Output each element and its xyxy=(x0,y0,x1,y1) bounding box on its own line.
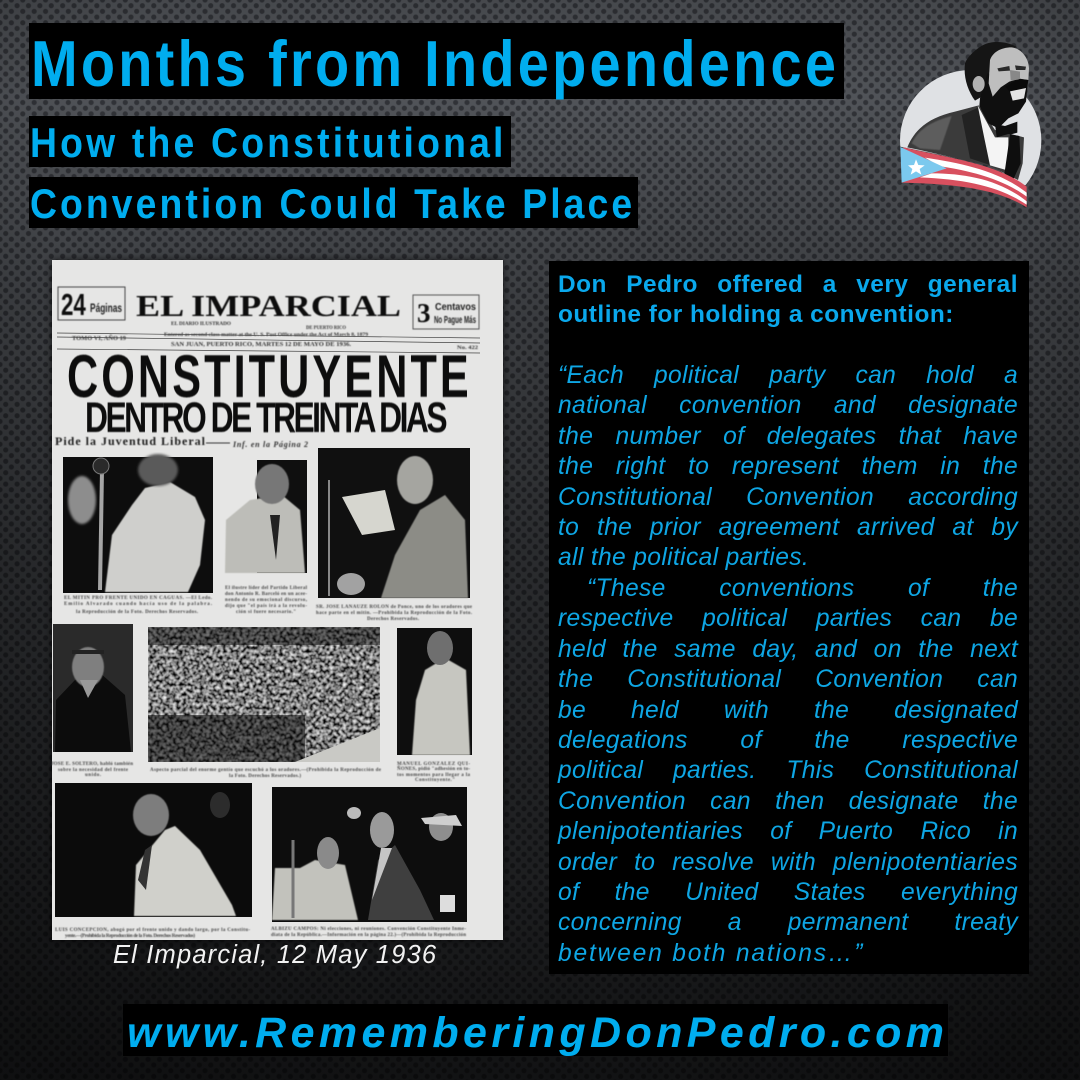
quote paragraph 2: the Constitutional Convention can xyxy=(558,666,1018,693)
quote paragraph 1: all the political parties. xyxy=(558,544,809,571)
quote paragraph 2: order to resolve with plenipotentiaries xyxy=(558,849,1018,876)
captions row 2 xyxy=(51,762,470,783)
nose shadow xyxy=(1010,70,1020,81)
quote paragraph 2: concerning a permanent treaty xyxy=(558,909,1018,936)
intro heading: Don Pedro offered a very general xyxy=(558,271,1018,298)
masthead small print: Entered as second class matter at the U. S. Post Office under the Act of March 8, 1879 xyxy=(164,333,369,338)
hair xyxy=(965,42,1017,101)
captions row 2: ÑONES, pidió "adhesión en to- xyxy=(397,766,470,772)
captions row 1 xyxy=(64,586,473,622)
paper xyxy=(52,260,503,940)
captions row 2: sobre la necesidad del frente xyxy=(58,768,129,773)
subtitle line 1: How the Constitutional xyxy=(30,120,503,166)
masthead: price box: 3 xyxy=(417,298,430,328)
moustache and mouth xyxy=(1005,79,1028,93)
masthead small print: EL DIARIO ILUSTRADO xyxy=(171,321,232,327)
photo 2: Liberal Party leader xyxy=(225,460,307,573)
captions row 1: ción si fuere necesario." xyxy=(236,610,296,615)
captions row 1: hace parte en el mitin. —Prohibida la Reproducción de la Foto. xyxy=(316,611,473,616)
portrait of Don Pedro with flag xyxy=(900,42,1041,211)
quote paragraph 1: “Each political party can hold a xyxy=(558,362,1018,389)
quote paragraph 1: national convention and designate xyxy=(558,392,1018,419)
bow tie and tie xyxy=(995,122,1021,179)
quote paragraph 1: the right to represent them in the xyxy=(558,453,1018,480)
quote paragraph 1 xyxy=(558,362,1019,571)
kicker xyxy=(55,434,308,449)
photo 1: speaker at microphone xyxy=(63,454,213,593)
jacket lit shoulder xyxy=(912,116,952,150)
masthead: price box: No Pague Más xyxy=(434,315,476,326)
masthead: page count box xyxy=(58,287,125,322)
subtitle line 2: Convention Could Take Place xyxy=(30,181,632,227)
shirt xyxy=(978,105,1008,171)
captions row 1: El ilustre líder del Partido Liberal xyxy=(225,586,308,591)
masthead small print: SAN JUAN, PUERTO RICO, MARTES 12 DE MAYO DE 1936. xyxy=(171,341,351,348)
captions row 1: EL MITIN PRO FRENTE UNIDO EN CAGUAS. —El Ledo. xyxy=(64,596,213,601)
quote paragraph 2: delegations of the respective xyxy=(558,727,1018,754)
quote paragraph 2: held the same day, and on the next xyxy=(558,636,1018,663)
captions row 3 xyxy=(55,927,466,939)
jacket lapel xyxy=(962,107,990,165)
flag star xyxy=(908,159,925,175)
photo 4: portrait with glasses xyxy=(53,624,133,752)
kicker: Pide la Juventud Liberal xyxy=(55,434,206,448)
captions row 3: diata de la República.—Información en la página 22.)—(Prohibida la Reproducción xyxy=(271,933,466,938)
sub-headline: DENTRO DE TREINTA DIAS xyxy=(85,394,448,442)
captions row 1: dijo que "el país irá a la revolu- xyxy=(225,604,307,609)
captions row 3: LUIS CONCEPCION, abogó por el frente unido y dando largo, por la Constitu- xyxy=(55,928,250,933)
headline: CONSTITUYENTE xyxy=(67,344,469,411)
photo 7: man in white jacket xyxy=(55,783,252,917)
masthead: price box: Centavos xyxy=(435,302,476,313)
intro heading xyxy=(558,271,1018,328)
newspaper page: El Imparcial xyxy=(51,260,503,940)
quote paragraph 2: between both nations…” xyxy=(558,940,864,967)
captions row 3: ALBIZU CAMPOS: Ni elecciones, ni reuniones. Convención Constituyente Inme- xyxy=(271,927,466,932)
quote paragraph 2: political parties. This Constitutional xyxy=(558,757,1018,784)
captions row 2: JOSE E. SOLTERO, habló también xyxy=(51,762,133,767)
captions row 1: nendo de su emocional discurso, xyxy=(225,598,308,603)
ear xyxy=(973,76,985,92)
eyes xyxy=(997,65,1026,71)
captions row 2: Aspecto parcial del enorme gentío que escuchó a los oradores.—(Prohibida la Reproducción de xyxy=(150,768,382,773)
masthead small print: No. 422 xyxy=(457,345,478,351)
captions row 1: SR. JOSE LANAUZE ROLON de Ponce, uno de los oradores que xyxy=(316,605,473,610)
photo 8: group at microphone xyxy=(272,787,467,922)
masthead: newspaper name: EL IMPARCIAL xyxy=(136,288,401,323)
quote paragraph 2: “These conventions of the xyxy=(587,575,1018,602)
quote paragraph 2: be held with the designated xyxy=(558,697,1018,724)
portrait circle xyxy=(900,70,1042,186)
photo 6: standing speaker xyxy=(397,628,472,755)
face lit area xyxy=(989,47,1029,97)
image caption: El Imparcial, 12 May 1936 xyxy=(113,941,437,969)
captions row 2: tos momentos para llegar a la xyxy=(397,773,470,778)
captions row 2: unido. xyxy=(85,773,102,778)
quote paragraph 2: of the United States everything xyxy=(558,879,1018,906)
quote paragraph 1: to the prior agreement arrived at by xyxy=(558,514,1018,541)
flag triangle xyxy=(900,147,947,183)
captions row 2: la Foto. Derechos Reservados.) xyxy=(229,774,301,779)
quote paragraph 2 xyxy=(557,575,1019,967)
masthead: page count box: 24 xyxy=(61,287,86,322)
title: Months from Independence xyxy=(31,27,836,100)
intro heading: outline for holding a convention: xyxy=(558,301,954,328)
head shadow and neck xyxy=(979,73,1028,128)
masthead: page count box: Páginas xyxy=(90,301,122,315)
flag stripes xyxy=(902,147,1027,207)
captions row 1: don Antonio R. Barceló en un acee- xyxy=(225,592,307,597)
quote paragraph 2: Convention can then designate the xyxy=(558,788,1018,815)
captions row 3: yente.—(Prohibida la Reproducción de la Foto. Derechos Reservados) xyxy=(65,934,195,939)
masthead small print: TOMO VI, AÑO 19 xyxy=(72,334,126,342)
quote paragraph 2: plenipotentiaries of Puerto Rico in xyxy=(558,818,1018,845)
captions row 1: Emilio Alvarado cuando hacía uso de la palabra. xyxy=(64,602,213,607)
quote paragraph 1: Constitutional Convention according xyxy=(558,484,1018,511)
jacket xyxy=(907,105,1024,180)
captions row 1: la Reproducción de la Foto. Derechos Reservados. xyxy=(76,610,199,615)
website footer: www.RememberingDonPedro.com xyxy=(127,1009,944,1057)
masthead small print: DE PUERTO RICO xyxy=(306,325,347,331)
quote paragraph 1: the number of delegates that have xyxy=(558,423,1018,450)
captions row 2: Constituyente." xyxy=(415,778,455,783)
quote paragraph 2: respective political parties can be xyxy=(558,605,1018,632)
photo 3: man reading at microphone xyxy=(318,448,470,598)
panel: Don Pedro convention outline quote xyxy=(549,261,1029,974)
masthead small print xyxy=(72,321,478,351)
masthead: price box xyxy=(413,295,479,329)
photo 5: crowd xyxy=(148,627,380,762)
captions row 1: Derechos Reservados. xyxy=(367,617,420,622)
captions row 2: MANUEL GONZALEZ QUI- xyxy=(397,762,470,767)
kicker: Inf. en la Página 2 xyxy=(232,440,308,449)
